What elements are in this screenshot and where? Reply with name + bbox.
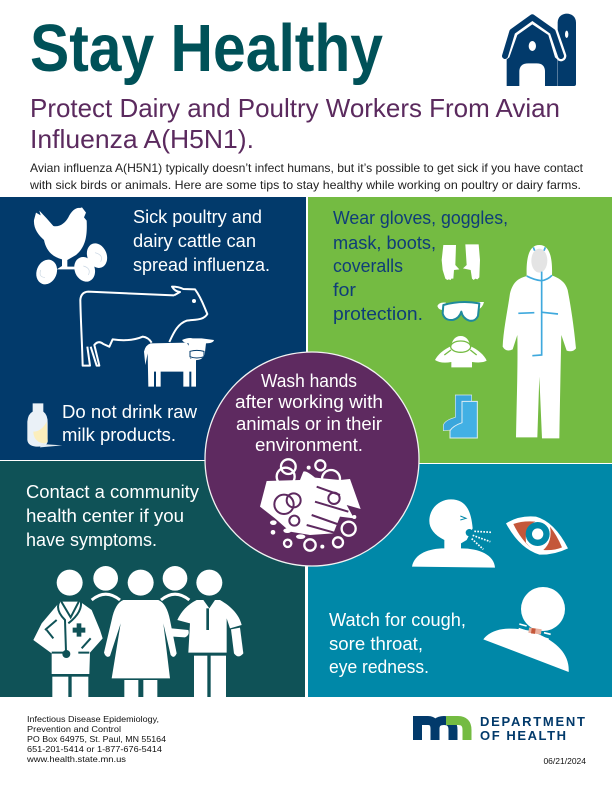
icon: person coughing — [412, 499, 495, 568]
icon: boots — [443, 395, 477, 438]
text: watch for: sore throat, — [329, 634, 423, 654]
intro text: with sick birds or animals. Here are some tips to stay healthy while working on poultry or dairy farms. — [29, 178, 581, 192]
icon: washing hands with bubbles — [260, 459, 361, 551]
text: contact: have symptoms. — [26, 530, 157, 550]
text: watch for: Watch for cough, — [329, 610, 466, 630]
icon: sore throat — [483, 587, 569, 672]
text: contact: Contact a community — [26, 482, 199, 502]
text: watch for — [329, 610, 466, 677]
panel: protective equipment — [308, 197, 612, 463]
icon: barn — [505, 14, 576, 86]
footer address: www.health.state.mn.us — [26, 754, 126, 764]
subtitle — [30, 93, 560, 154]
panel: sick animals and raw milk — [0, 197, 306, 460]
text: watch for: eye redness. — [329, 657, 429, 677]
intro text: Avian influenza A(H5N1) typically doesn’t infect humans, but it’s possible to get sick if you have contact — [30, 161, 584, 175]
text: wear protection: Wear gloves, goggles, — [333, 208, 508, 228]
icon: health care workers — [33, 566, 243, 697]
text: wash hands: Wash hands — [261, 371, 357, 391]
footer address: Infectious Disease Epidemiology, — [27, 714, 159, 724]
subtitle: Protect Dairy and Poultry Workers From Avian — [30, 93, 560, 123]
logo: Minnesota Department of Health: OF HEALTH — [480, 728, 566, 743]
icon: coveralls — [503, 245, 576, 438]
footer address: PO Box 64975, St. Paul, MN 55164 — [27, 734, 166, 744]
text: raw milk: Do not drink raw — [62, 402, 198, 422]
icon: mask — [435, 336, 487, 367]
icon: hen and chicks — [33, 207, 111, 287]
icon: calf — [144, 338, 214, 387]
panel: watch for symptoms — [308, 464, 612, 697]
text: wear protection: mask, boots, — [333, 233, 436, 253]
panel: contact health center — [0, 461, 305, 697]
title: Stay Healthy — [30, 11, 383, 86]
text: sick poultry: Sick poultry and — [133, 207, 262, 227]
icon: cow — [80, 287, 207, 366]
footer address: Prevention and Control — [27, 724, 121, 734]
panel: wash hands circle — [205, 352, 419, 566]
icon: red eye — [506, 516, 568, 555]
icon: milk bottle — [27, 403, 62, 447]
text: wash hands — [235, 371, 383, 455]
text: wear protection: coveralls — [333, 256, 403, 276]
text: sick poultry: spread influenza. — [133, 255, 270, 275]
text: contact: health center if you — [26, 506, 184, 526]
text: wear protection — [333, 208, 508, 324]
subtitle: Influenza A(H5N1). — [30, 124, 254, 154]
icon: gloves — [442, 244, 480, 280]
text: wash hands: after working with — [235, 392, 383, 412]
text: sick poultry — [133, 207, 270, 275]
footer address: 651-201-5414 or 1-877-676-5414 — [27, 744, 162, 754]
text: raw milk: milk products. — [62, 425, 176, 445]
icon: goggles — [437, 302, 484, 321]
logo: Minnesota Department of Health — [418, 714, 585, 743]
intro text — [29, 161, 584, 192]
text: contact — [26, 482, 199, 550]
logo: Minnesota Department of Health: DEPARTMENT — [480, 714, 585, 729]
text: wear protection: protection. — [333, 304, 423, 324]
text: sick poultry: dairy cattle can — [133, 231, 256, 251]
date: 06/21/2024 — [543, 756, 586, 766]
text: wear protection: for — [333, 280, 356, 300]
footer address — [26, 714, 166, 764]
text: raw milk — [62, 402, 198, 445]
text: wash hands: animals or in their — [236, 414, 382, 434]
text: wash hands: environment. — [255, 435, 363, 455]
